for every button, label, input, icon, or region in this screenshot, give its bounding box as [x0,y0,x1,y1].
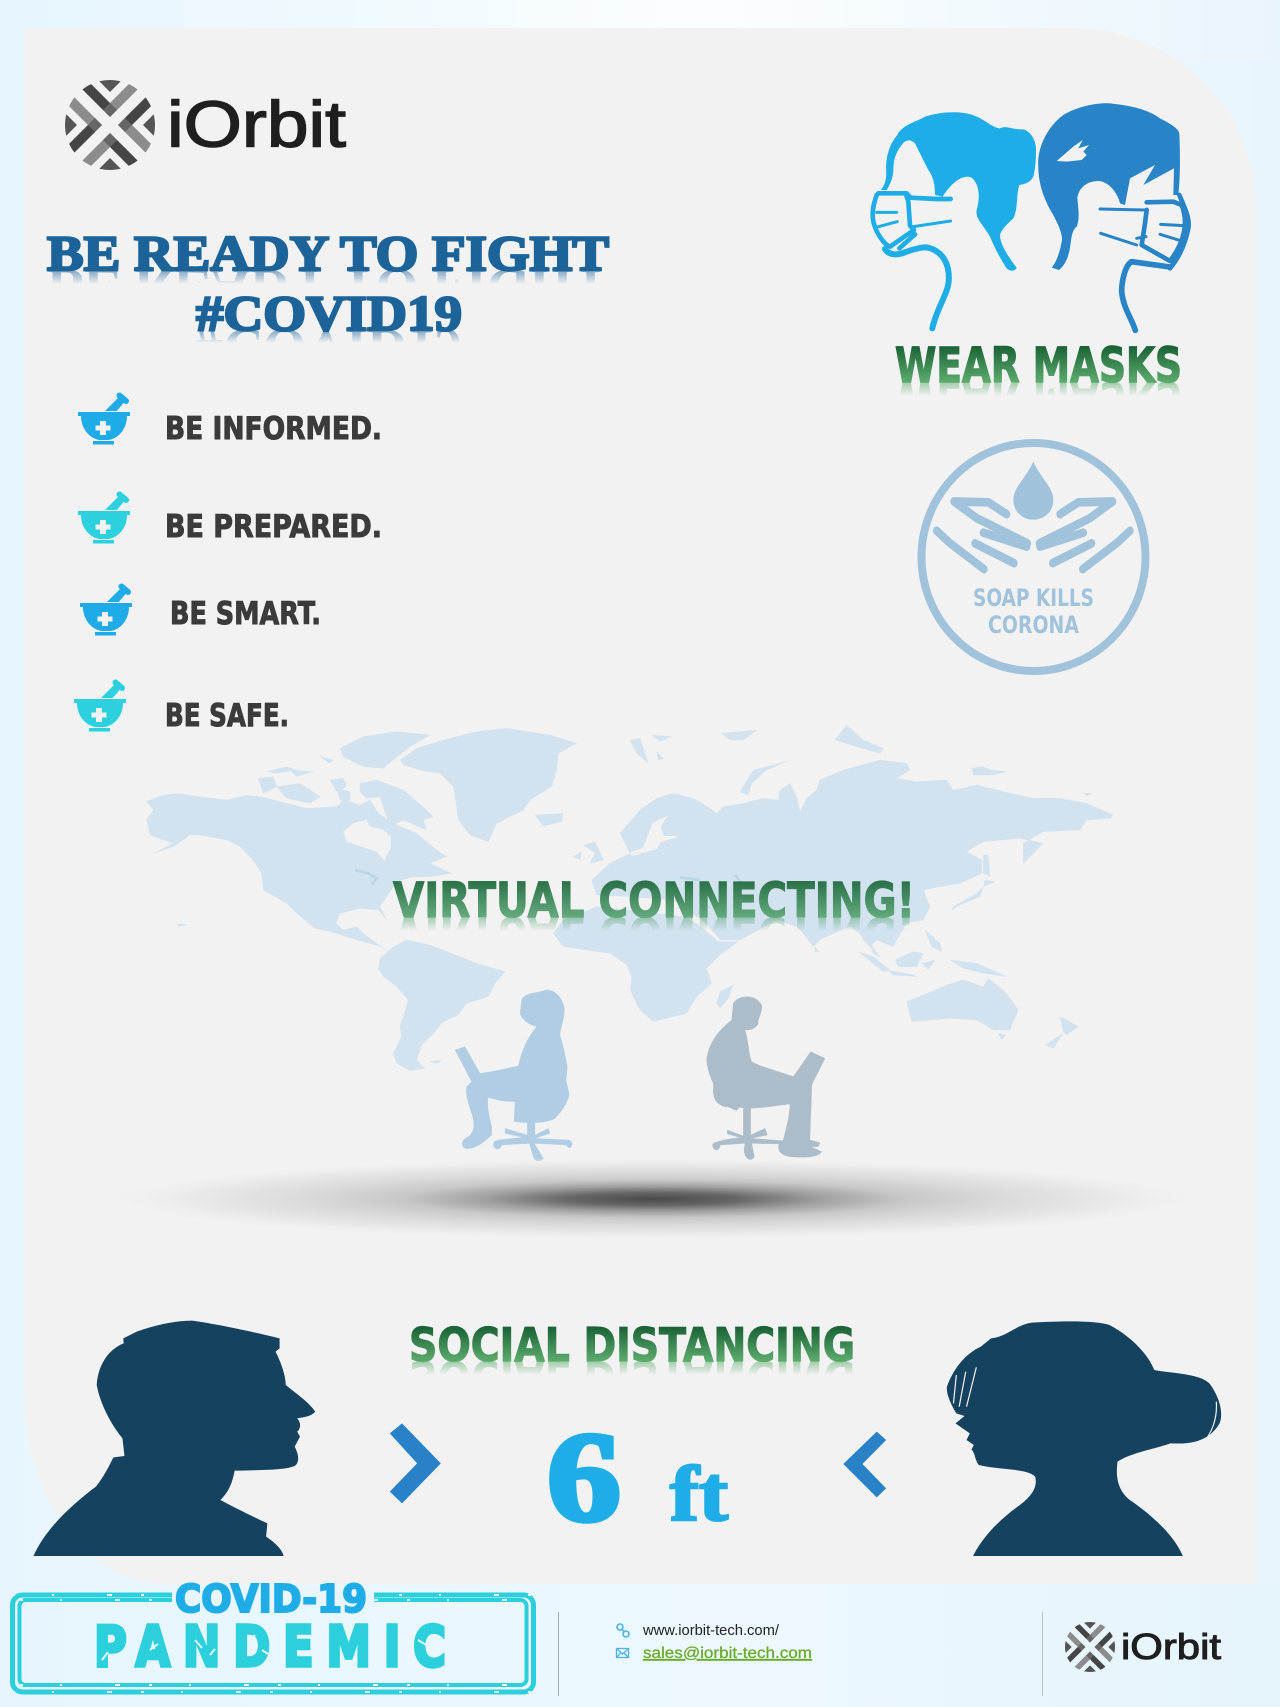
stamp outer frame [12,1595,534,1692]
badge text line 2: CORONA [988,611,1079,639]
world map [147,725,1113,1071]
man silhouette on laptop [707,997,825,1160]
woman with mask [873,112,1036,328]
heading: virtual connecting: VIRTUAL CONNECTING! [393,905,915,961]
heading: social distancing [409,1318,855,1404]
africa [553,907,738,1022]
icon: mail [616,1648,628,1658]
northern islands [630,725,1092,796]
heading: wear masks: WEAR MASKS [895,370,1182,426]
title line 1 [47,225,609,315]
icon: two people wearing masks [873,103,1189,330]
stamp inner frame [20,1600,526,1685]
logo: iOrbit footer [1064,1621,1221,1673]
contact details [616,1623,812,1662]
stamp text: pandemic: PANDEMIC [94,1614,446,1679]
north america [147,794,452,950]
hudson bay [343,820,391,861]
divider right [1042,1612,1043,1696]
title line 1: BE READY TO FIGHT [47,259,609,315]
arrow: left chevron [843,1432,886,1497]
ground shadow [93,1157,1213,1241]
icon: mortar 2 [78,494,130,544]
arrow: right chevron [390,1423,441,1503]
icon: mortar 3 [80,586,132,636]
text: be safe: BE SAFE. [165,698,289,734]
inland seas [355,870,742,885]
woman silhouette on laptop [455,990,572,1161]
text: be informed: BE INFORMED. [165,411,382,447]
south america [378,940,505,1071]
icon: link [617,1624,629,1637]
text: email: sales@iorbit-tech.com [643,1645,812,1662]
badge: soap kills corona [922,443,1146,671]
heading: wear masks [895,338,1182,426]
iceland and uk [178,813,603,927]
icon: hands and water drop [937,462,1130,569]
people on laptops [455,990,825,1161]
text: be smart: BE SMART. [170,596,321,632]
logo: iOrbit header [63,78,346,172]
title line 2: #COVID19 [196,319,462,375]
heading: social distancing: SOCIAL DISTANCING [409,1350,855,1404]
icon: iOrbit mark [63,78,157,172]
man head silhouette [33,1321,315,1556]
divider left [558,1612,559,1696]
wordmark: iOrbit [167,88,346,160]
man with mask [1038,103,1189,330]
woman head silhouette [947,1321,1221,1556]
title [47,225,609,375]
distance value: 6: 6 [547,1406,621,1548]
madagascar [717,985,733,1008]
icon: iOrbit mark small [1064,1621,1116,1673]
australia and new zealand [907,978,1078,1048]
distance unit: ft: ft [670,1450,728,1537]
heading: virtual connecting [393,873,915,961]
arctic islands [258,732,433,830]
title line 1: BE READY TO FIGHT [47,225,609,281]
heading: wear masks: WEAR MASKS [895,338,1182,394]
checklist [74,396,382,734]
stamp text: covid-19: COVID-19 [175,1577,367,1621]
stamp: covid-19 pandemic [12,1577,534,1692]
heading: social distancing: SOCIAL DISTANCING [409,1318,855,1372]
eurasia [592,760,1113,947]
japan and east asia islands [815,855,1007,977]
title line 2: #COVID19 [196,285,462,341]
text: be prepared: BE PREPARED. [165,509,382,545]
badge ring [922,443,1146,671]
footer wordmark: iOrbit [1121,1626,1221,1667]
baltic sea [630,817,677,855]
text: website: www.iorbit-tech.com/ [642,1623,780,1639]
icon: mortar 4 [74,682,126,732]
red sea [698,917,720,941]
heading: virtual connecting: VIRTUAL CONNECTING! [393,873,915,929]
icon: mortar 1 [78,396,130,444]
greenland [400,728,577,842]
badge text line 1: SOAP KILLS [973,584,1094,612]
title line 2 [196,285,462,375]
